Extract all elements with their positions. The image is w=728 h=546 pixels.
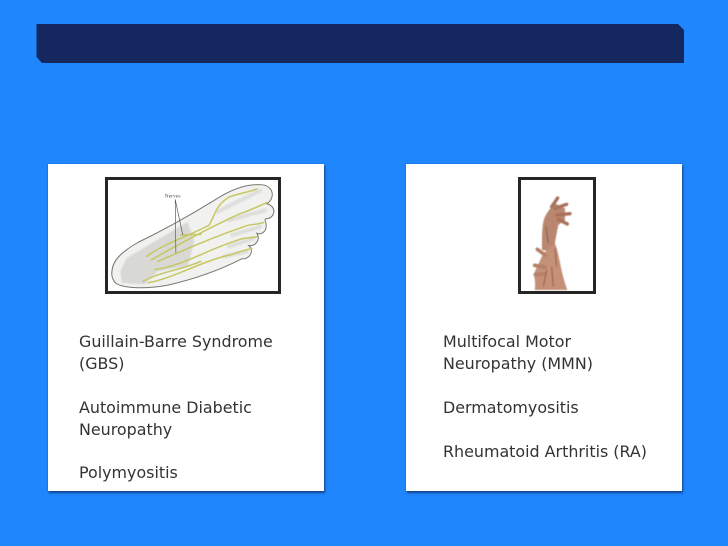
text: left list: Neuropathy [79,420,172,439]
text: right list [443,332,647,461]
text: right list: Neuropathy (MMN) [443,354,593,373]
text: right list: Multifocal Motor [443,332,571,351]
text: left list: Polymyositis [79,463,178,482]
text: left list: Guillain-Barre Syndrome [79,332,273,351]
text: right list: Dermatomyositis [443,398,579,417]
text: right list: Rheumatoid Arthritis (RA) [443,442,647,461]
panel: left conditions [48,164,324,491]
image: foot nerves [105,177,281,294]
text: left list: (GBS) [79,354,124,373]
panel: right conditions [406,164,682,491]
header bar [36,24,684,63]
text: left list: Autoimmune Diabetic [79,398,252,417]
label: Nerves: Nerves [165,193,181,199]
image: hands [518,177,596,294]
text: left list [79,332,273,482]
